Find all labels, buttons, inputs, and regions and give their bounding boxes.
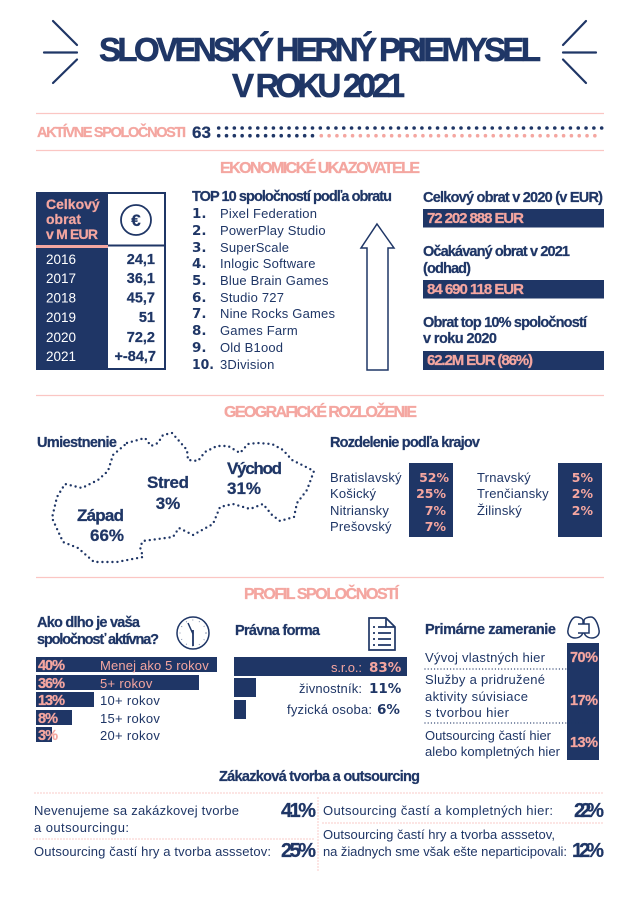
panel: outsourcing stats: a outsourcingu: xyxy=(34,820,129,835)
icon: euro coin: € xyxy=(131,211,141,230)
panel: primary focus: Služby a pridružené xyxy=(425,672,545,687)
active companies counter: AKTÍVNE SPOLOČNOSTI xyxy=(37,123,186,141)
panel: top 10 companies: Inlogic Software xyxy=(220,256,316,271)
heading: economic indicators: EKONOMICKÉ UKAZOVATELE xyxy=(220,158,420,177)
panel: top 10 companies: 3. xyxy=(192,240,207,256)
panel: top 10 companies: Old B1ood xyxy=(220,340,283,355)
age bars xyxy=(36,657,217,742)
panel: location map: Západ xyxy=(77,506,124,525)
panel: location map: 66% xyxy=(90,526,124,545)
panel: primary focus: s tvorbou hier xyxy=(425,705,510,720)
panel: top 10 companies: 10. xyxy=(192,357,214,373)
panel: revenue table: 72,2 xyxy=(127,330,155,346)
panel: outsourcing stats: Nevenujeme sa zakázkovej tvorbe xyxy=(34,803,239,818)
panel: distribution by region: 2% xyxy=(572,503,593,518)
panel: distribution by region: 7% xyxy=(425,503,446,518)
panel: top 10 companies: SuperScale xyxy=(220,240,289,255)
icon: left rays xyxy=(44,21,77,83)
panel: outsourcing stats: 12% xyxy=(572,840,604,862)
panel: top 10 companies: Games Farm xyxy=(220,323,298,338)
panel: revenue table: 2019 xyxy=(46,310,76,325)
panel: distribution by region: Bratislavský xyxy=(330,470,402,485)
panel: outsourcing stats: na žiadnych sme však ešte neparticipovali: xyxy=(323,844,567,859)
panel: revenue table: v M EUR xyxy=(46,226,98,242)
panel: revenue totals xyxy=(423,190,604,370)
panel: revenue table: 2020 xyxy=(46,330,76,345)
icon: right rays xyxy=(563,21,596,83)
icon: clock xyxy=(177,617,209,649)
panel: top 10 companies: Pixel Federation xyxy=(220,206,317,221)
panel: top 10 companies: 6. xyxy=(192,290,207,306)
panel: top 10 companies: PowerPlay Studio xyxy=(220,223,326,238)
panel: location map: Umiestnenie xyxy=(37,435,117,451)
panel: revenue totals: (odhad) xyxy=(423,261,471,277)
panel: company age xyxy=(36,615,217,744)
panel: top 10 companies: 1. xyxy=(192,206,207,222)
panel: distribution by region: Trenčiansky xyxy=(477,486,549,501)
panel: top 10 companies: Studio 727 xyxy=(220,290,284,305)
panel: distribution by region: Košický xyxy=(330,486,376,501)
panel: revenue table: 2016 xyxy=(46,252,76,267)
icon: binoculars xyxy=(568,617,599,638)
panel: company age: Menej ako 5 rokov xyxy=(100,658,209,673)
panel: outsourcing stats xyxy=(34,793,604,872)
panel: legal form: s.r.o.: xyxy=(331,660,362,675)
panel: location map: 31% xyxy=(227,479,261,498)
panel: company age: 20+ rokov xyxy=(100,728,160,743)
panel: revenue table: 2017 xyxy=(46,271,76,286)
panel: top 10 companies: 7. xyxy=(192,306,207,322)
panel: outsourcing stats: 25% xyxy=(281,840,316,862)
panel: distribution by region: 2% xyxy=(572,486,593,501)
panel: legal form: Právna forma xyxy=(235,623,321,639)
panel: outsourcing stats: 22% xyxy=(574,800,604,822)
panel: revenue table: 2018 xyxy=(46,290,76,306)
panel: primary focus: aktivity súvisiace xyxy=(425,689,528,704)
panel: distribution by region: 7% xyxy=(425,519,446,534)
panel: revenue totals: Očakávaný obrat v 2021 xyxy=(423,244,570,260)
panel: company age: 3% xyxy=(38,728,58,744)
heading: geographic distribution: GEOGRAFICKÉ ROZLOŽENIE xyxy=(224,402,417,421)
active companies counter: 63 xyxy=(192,123,211,142)
panel: top 10 companies: 3Division xyxy=(220,357,275,372)
panel: outsourcing stats: Outsourcing častí hry a tvorba asssetov: xyxy=(34,844,271,859)
icon: up arrow xyxy=(361,224,394,370)
panel: legal form: 83% xyxy=(369,660,402,676)
panel: revenue table: Celkový xyxy=(46,196,100,212)
panel: primary focus: 17% xyxy=(570,693,598,709)
panel: revenue table: 51 xyxy=(139,310,155,326)
panel: top 10 companies: 5. xyxy=(192,273,207,289)
panel: location map xyxy=(37,433,314,562)
panel: legal form xyxy=(234,618,407,719)
panel: legal form: 11% xyxy=(369,681,402,697)
panel: revenue totals: Celkový obrat v 2020 (v EUR) xyxy=(423,190,603,206)
panel: primary focus: Vývoj vlastných hier xyxy=(425,650,546,665)
panel: top 10 companies: Blue Brain Games xyxy=(220,273,329,288)
active companies counter xyxy=(37,123,602,142)
panel: revenue totals: v roku 2020 xyxy=(423,331,497,347)
panel: revenue table xyxy=(36,192,165,370)
panel: revenue table: 36,1 xyxy=(127,271,155,287)
panel: primary focus: Outsourcing častí hier xyxy=(425,728,552,743)
panel: location map: 3% xyxy=(156,494,180,513)
panel: company age: 8% xyxy=(38,711,58,727)
panel: company age: spoločnosť aktívna? xyxy=(37,632,159,648)
title xyxy=(99,31,541,104)
panel: company age: 10+ rokov xyxy=(100,693,160,708)
panel: distribution by region xyxy=(330,435,602,537)
panel: revenue table: obrat xyxy=(46,211,81,227)
panel: primary focus: 70% xyxy=(570,650,598,666)
panel: distribution by region: Prešovský xyxy=(330,519,392,534)
panel: company age: 13% xyxy=(38,693,65,709)
panel: revenue totals: Obrat top 10% spoločností xyxy=(423,315,588,331)
panel: top 10 companies: TOP 10 spoločností podľa obratu xyxy=(192,189,392,205)
panel: company age: 36% xyxy=(38,676,65,692)
icon: euro coin xyxy=(121,205,151,235)
panel: distribution by region: 5% xyxy=(572,470,593,485)
panel: outsourcing stats: 41% xyxy=(281,800,316,822)
panel: location map: Východ xyxy=(227,459,282,478)
heading: company profile: PROFIL SPOLOČNOSTÍ xyxy=(244,584,400,603)
panel: revenue table: 2021 xyxy=(46,349,76,364)
panel: legal form: 6% xyxy=(377,702,400,718)
panel: primary focus: 13% xyxy=(570,735,598,751)
panel: revenue table: 24,1 xyxy=(127,252,155,268)
panel: company age: 40% xyxy=(38,658,65,674)
panel: location map: Stred xyxy=(147,473,189,492)
title: V ROKU 2021 xyxy=(232,67,405,104)
panel: distribution by region: 52% xyxy=(419,470,449,485)
title: SLOVENSKÝ HERNÝ PRIEMYSEL xyxy=(99,31,541,68)
panel: distribution by region: Trnavský xyxy=(477,470,531,485)
icon: document xyxy=(369,618,395,650)
map outline of Slovakia xyxy=(52,433,314,562)
panel: company age: 15+ rokov xyxy=(100,711,160,726)
panel: revenue table: 45,7 xyxy=(127,290,155,306)
panel: distribution by region: Nitriansky xyxy=(330,503,389,518)
panel: company age: Ako dlho je vaša xyxy=(37,615,141,631)
panel: distribution by region: Rozdelenie podľa krajov xyxy=(330,435,480,451)
panel: revenue totals: 72 202 888 EUR xyxy=(427,210,524,227)
panel: outsourcing stats: Outsourcing častí a kompletných hier: xyxy=(323,803,553,818)
panel: revenue totals: 84 690 118 EUR xyxy=(427,281,524,298)
panel: top 10 companies: 4. xyxy=(192,256,207,272)
panel: primary focus xyxy=(425,617,599,760)
panel: top 10 companies: 8. xyxy=(192,323,207,339)
panel: revenue table: +-84,7 xyxy=(114,349,156,365)
panel: legal form: fyzická osoba: xyxy=(287,702,372,717)
panel: outsourcing stats: Outsourcing častí hry a tvorba asssetov, xyxy=(323,827,555,842)
heading: custom work and outsourcing: Zákazková tvorba a outsourcing xyxy=(219,769,420,785)
panel: top 10 companies: 2. xyxy=(192,223,207,239)
panel: primary focus: Primárne zameranie xyxy=(425,622,556,638)
panel: primary focus: alebo kompletných hier xyxy=(425,744,561,759)
panel: distribution by region: Žilinský xyxy=(477,503,522,518)
panel: company age: 5+ rokov xyxy=(100,676,153,691)
panel: distribution by region: 25% xyxy=(416,486,446,501)
panel: top 10 companies xyxy=(192,189,392,373)
panel: revenue totals: 62.2M EUR (86%) xyxy=(427,352,533,369)
panel: top 10 companies: Nine Rocks Games xyxy=(220,306,335,321)
panel: top 10 companies: 9. xyxy=(192,340,207,356)
panel: legal form: živnostník: xyxy=(299,681,362,696)
